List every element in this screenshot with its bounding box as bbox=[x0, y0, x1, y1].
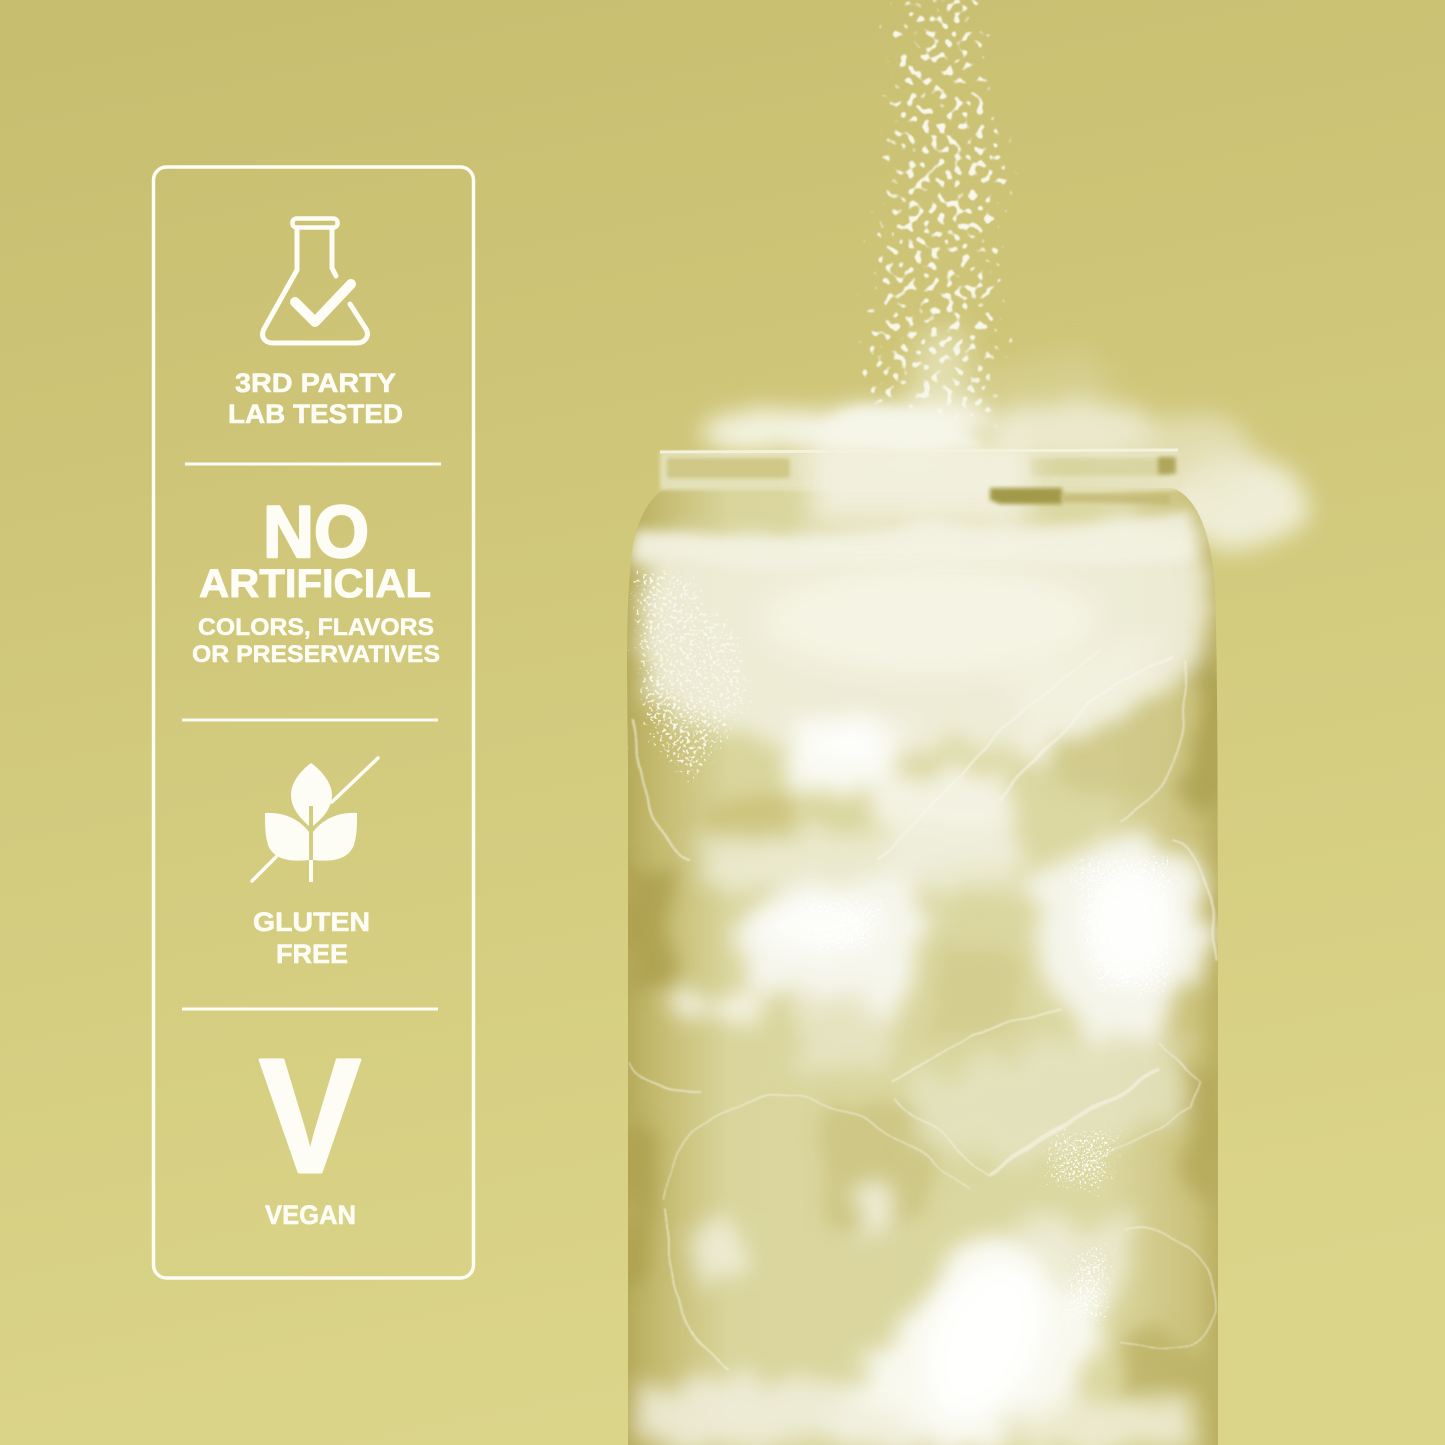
label: gluten free bbox=[253, 907, 370, 969]
powder stream bbox=[860, 0, 1015, 425]
powder dust on ice bbox=[790, 850, 1180, 1330]
badge panel bbox=[154, 167, 474, 1278]
label: gluten free: GLUTEN bbox=[253, 907, 370, 937]
dark liquid pockets bbox=[622, 630, 1222, 1400]
badge: 3rd party lab tested bbox=[228, 218, 403, 429]
badge: no artificial: ARTIFICIAL bbox=[199, 562, 431, 606]
glass interior clipped to the glass outline bbox=[620, 480, 1225, 1445]
label: gluten free: FREE bbox=[276, 939, 348, 969]
ice cube edges bbox=[630, 650, 1215, 1370]
icon: crossed-out wheat leaf bbox=[252, 758, 378, 882]
water surface band bbox=[635, 510, 1195, 571]
badge: no artificial: NO bbox=[263, 492, 369, 573]
upper haze bbox=[640, 520, 1205, 750]
label: 3rd party lab tested: LAB TESTED bbox=[228, 399, 403, 429]
badge: no artificial: OR PRESERVATIVES bbox=[192, 641, 440, 668]
bright ice highlights bbox=[758, 565, 1178, 1440]
badge: vegan: V bbox=[259, 1024, 361, 1207]
powder speckles on inside wall bbox=[630, 565, 755, 790]
powder cloud above glass bbox=[700, 357, 1305, 551]
ice lump at rim bbox=[820, 407, 985, 450]
badge: gluten free bbox=[252, 758, 378, 969]
panel outline bbox=[154, 167, 474, 1278]
glass rim bbox=[660, 440, 1178, 525]
falling powder particles bbox=[860, 0, 1015, 425]
glass body and liquid bbox=[620, 480, 1225, 1445]
icon: flask with check bbox=[263, 218, 367, 343]
badge: no artificial: COLORS, FLAVORS bbox=[198, 614, 434, 641]
badge: vegan: VEGAN bbox=[265, 1200, 356, 1230]
dense powder core bbox=[900, 330, 975, 425]
label: 3rd party lab tested: 3RD PARTY bbox=[235, 368, 396, 398]
label: 3rd party lab tested bbox=[228, 368, 403, 429]
badge: no artificial bbox=[192, 492, 440, 668]
ice cube masses bbox=[640, 635, 1210, 1445]
drinking glass with ice bbox=[620, 407, 1225, 1445]
